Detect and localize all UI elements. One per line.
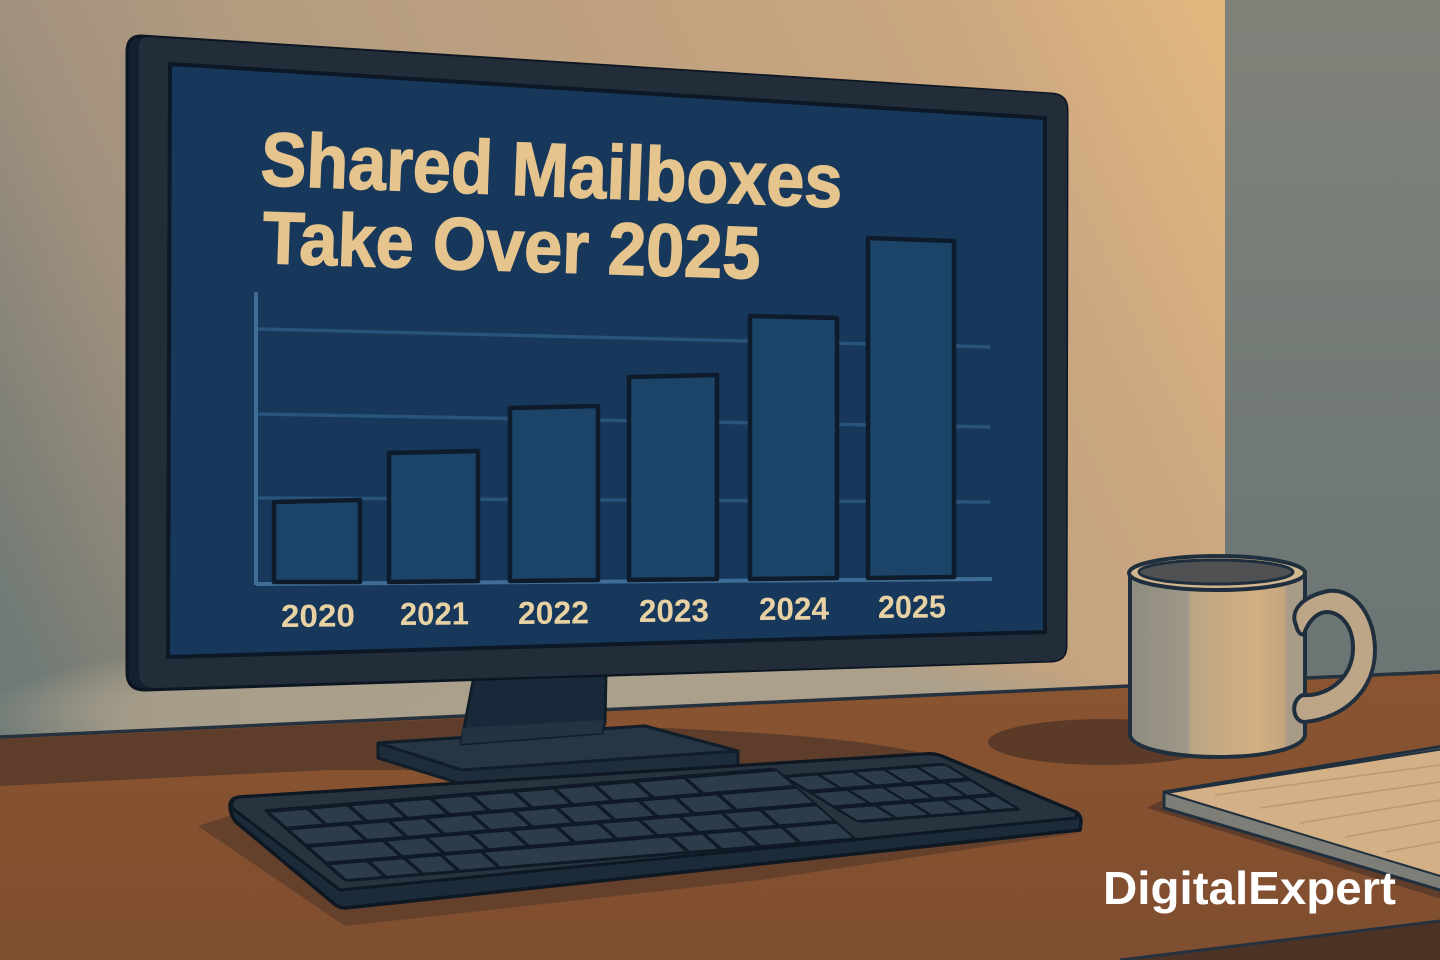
monitor [127,36,1067,690]
year labels: 2022 [518,594,589,631]
bar: 2021 [389,451,478,582]
monitor screen [168,64,1045,657]
chart title: Take Over 2025 [261,196,762,295]
mug shadow [988,719,1222,765]
year labels: 2023 [639,592,709,629]
year labels: 2020 [281,597,355,634]
year labels [281,588,946,634]
bar: 2022 [510,406,598,581]
mug body [1130,572,1305,757]
bar: 2025 [868,238,954,578]
year labels: 2024 [759,590,829,627]
bar: 2024 [750,316,837,579]
monitor shadow on desk [0,718,925,786]
bar: 2023 [629,375,717,580]
year labels: 2025 [878,588,946,625]
bar chart [256,238,992,634]
main keys [262,767,858,882]
mug handle [1294,591,1375,722]
chart title: Shared Mailboxes [259,117,844,224]
notebook [1147,745,1440,900]
numeric keypad keys [780,763,1023,823]
coffee surface [1139,560,1293,584]
mug rim [1129,556,1305,590]
keyboard [230,754,1081,908]
brand wordmark: DigitalExpert [1103,862,1396,914]
monitor stand [378,672,738,784]
chart title [259,117,844,295]
keyboard shadow [198,815,1085,926]
coffee mug [1129,556,1375,757]
year labels: 2021 [400,595,469,632]
bar: 2020 [274,500,360,582]
desk [0,672,1440,960]
